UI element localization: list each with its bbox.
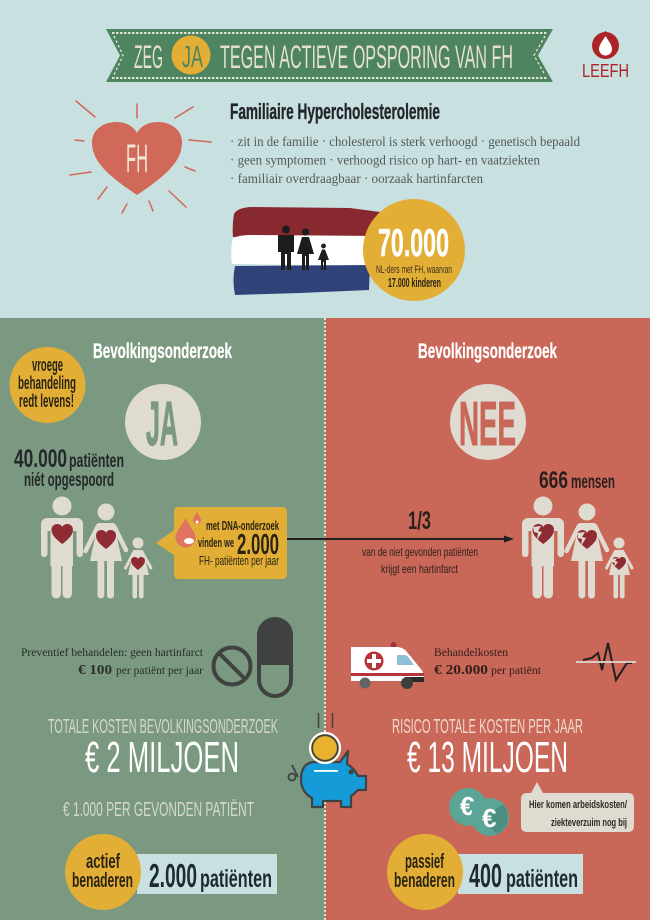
badge: passief benaderen 400 patienten: 400 <box>469 857 502 894</box>
badge: actief benaderen 2.000 patienten: benaderen <box>72 870 133 892</box>
icon: ambulance <box>351 642 424 689</box>
icon: piggy bank with coin <box>288 713 366 807</box>
text block: FH facts: · zit in de familie · cholesterol is sterk verhoogd · genetisch bepaald <box>230 134 580 149</box>
callout: vroege behandeling: redt levens! <box>19 391 74 411</box>
title banner: JA <box>182 39 203 74</box>
heading: Bevolkingsonderzoek JA: Bevolkingsonderzoek <box>93 340 232 363</box>
logo: LEEFH: LEEFH <box>582 61 629 81</box>
logo: LEEFH <box>582 31 629 81</box>
icon: pill <box>259 619 291 696</box>
text block: preventief behandelen: € 100 <box>78 663 112 678</box>
badge: passief benaderen 400 patienten <box>387 834 583 910</box>
callout: DNA-onderzoek <box>156 507 287 579</box>
callout: 70.000: 70.000 <box>378 222 449 265</box>
text block: 40.000 patienten: niét opgespoord <box>24 470 114 491</box>
text block: 666 mensen: mensen <box>571 472 615 493</box>
callout: 70.000: NL-ders met FH, waarvan <box>376 264 452 276</box>
text block: behandelkosten: per patiënt <box>491 665 542 677</box>
panel: JA (green) <box>0 318 325 920</box>
text block: totale kosten bevolkingsonderzoek: € 2 MILJOEN <box>85 733 239 782</box>
callout: arbeidskosten <box>521 782 634 832</box>
icon: FH heart with rays: FH <box>126 137 148 181</box>
text block: preventief behandelen: Preventief behandelen: geen hartinfarct <box>21 647 204 659</box>
text block: preventief behandelen: per patiënt per jaar <box>116 665 203 677</box>
icon: FH heart with rays <box>70 101 211 213</box>
text block: FH facts: · geen symptomen · verhoogd risico op hart- en vaatziekten <box>230 152 540 168</box>
text block: behandelkosten: € 20.000 <box>434 663 488 678</box>
text block: 1/3: 1/3 <box>408 507 431 535</box>
badge: actief benaderen 2.000 patienten: 2.000 <box>149 857 197 894</box>
icon: heartbeat line <box>576 643 636 680</box>
badge: NEE <box>450 384 526 460</box>
text block: FH facts <box>230 134 580 186</box>
badge: passief benaderen 400 patienten: benaderen <box>394 870 455 892</box>
callout: DNA-onderzoek: FH- patiënten per jaar <box>199 554 279 568</box>
text block: FH facts: · familiair overdraagbaar · oorzaak hartinfarcten <box>230 171 483 186</box>
badge: actief benaderen 2.000 patienten: patiënten <box>200 865 272 893</box>
text block: 1/3 <box>362 507 478 576</box>
callout: DNA-onderzoek: 2.000 <box>237 529 279 561</box>
text block: 40.000 patienten <box>14 445 124 491</box>
text block: risico totale kosten <box>392 716 583 782</box>
badge: NEE: NEE <box>459 390 516 459</box>
callout: 70.000 <box>363 199 465 301</box>
panel: NEE (red) <box>325 318 650 920</box>
text block: 40.000 patienten: 40.000 <box>14 445 67 473</box>
icon: euro coins: € <box>482 803 496 833</box>
text block: totale kosten bevolkingsonderzoek: TOTALE KOSTEN BEVOLKINGSONDERZOEK <box>48 716 278 738</box>
heading: Bevolkingsonderzoek NEE: Bevolkingsonderzoek <box>418 340 557 363</box>
icon: Dutch flag with family <box>231 207 380 295</box>
badge: actief benaderen 2.000 patienten: actief <box>86 851 120 873</box>
callout: DNA-onderzoek: vinden we <box>198 536 234 550</box>
text block: 1/3: van de niet gevonden patiënten <box>362 545 478 559</box>
text block: totale kosten bevolkingsonderzoek <box>48 716 278 821</box>
text block: 666 mensen: 666 <box>539 467 568 494</box>
icon: family with broken hearts <box>522 496 632 598</box>
text block: 666 mensen <box>539 467 615 494</box>
text block: 1/3: krijgt een hartinfarct <box>381 562 458 576</box>
callout: 70.000: 17.000 kinderen <box>388 275 441 290</box>
text block: behandelkosten <box>434 647 542 678</box>
text block: behandelkosten: Behandelkosten <box>434 647 508 659</box>
icon: no-sign <box>214 648 250 684</box>
icon: healthy family <box>41 496 151 598</box>
badge: JA: JA <box>146 390 178 459</box>
text block: totale kosten bevolkingsonderzoek: € 1.000 PER GEVONDEN PATIËNT <box>63 799 254 821</box>
title banner <box>106 29 553 82</box>
badge: JA <box>125 384 201 460</box>
text block: preventief behandelen <box>21 647 204 678</box>
icon: euro coins: € <box>460 791 474 821</box>
text block: 40.000 patienten: patiënten <box>69 451 124 472</box>
callout: DNA-onderzoek: met DNA-onderzoek <box>206 519 279 533</box>
icon: euro coins <box>449 788 509 836</box>
badge: actief benaderen 2.000 patienten <box>65 834 277 910</box>
callout: vroege behandeling <box>10 347 86 423</box>
callout: vroege behandeling: vroege <box>32 355 63 375</box>
arrow <box>287 536 514 542</box>
heading: Familiaire Hypercholesterolemie: Familiaire Hypercholesterolemie <box>230 99 440 124</box>
badge: passief benaderen 400 patienten: patiënten <box>506 865 578 893</box>
callout: vroege behandeling: behandeling <box>18 373 76 393</box>
title banner: ZEG <box>134 39 163 75</box>
badge: passief benaderen 400 patienten: passief <box>405 851 444 873</box>
